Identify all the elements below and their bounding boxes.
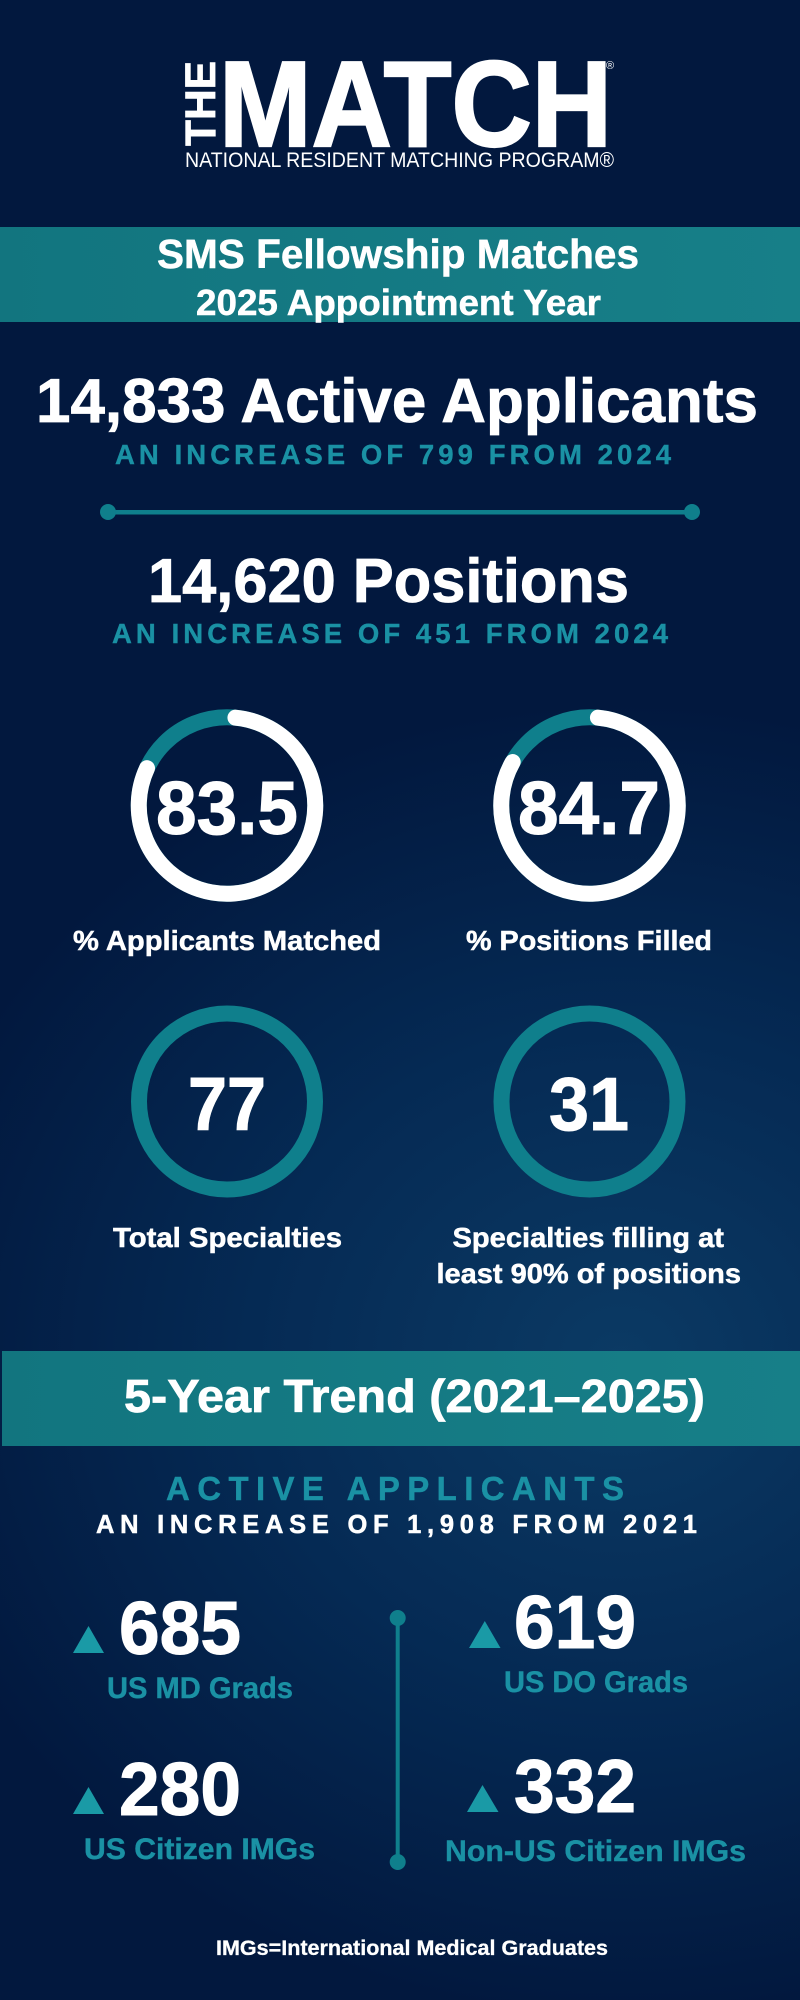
- trend increase note: AN INCREASE OF 1,908 FROM 2021: [96, 1511, 697, 1539]
- title line 1: SMS Fellowship Matches: [157, 231, 639, 277]
- ring: total specialties: [113, 1014, 342, 1253]
- gauge: percent positions filled: [466, 717, 712, 956]
- logo: The Match, National Resident Matching Program: [177, 36, 614, 172]
- label US MD Grads: US MD Grads: [107, 1672, 293, 1705]
- icon: up triangle: [73, 1626, 104, 1653]
- trend subheading: ACTIVE APPLICANTS: [166, 1470, 624, 1507]
- value 332: 332: [514, 1744, 636, 1828]
- title banner: [0, 227, 800, 323]
- stat: active applicants: [36, 366, 758, 470]
- value 83.5: 83.5: [156, 766, 298, 850]
- logo subtitle: NATIONAL RESIDENT MATCHING PROGRAM®: [185, 149, 614, 172]
- positions increase note: AN INCREASE OF 451 FROM 2024: [112, 618, 669, 649]
- icon: up triangle: [467, 1785, 498, 1812]
- stat: active applicants: 14,833 Active Applicants: [36, 366, 758, 436]
- stat: US MD Grads: [73, 1586, 293, 1705]
- label Non-US Citizen IMGs: Non-US Citizen IMGs: [445, 1835, 746, 1868]
- trend subheading: [96, 1470, 697, 1539]
- label US Citizen IMGs: US Citizen IMGs: [84, 1833, 315, 1866]
- logo word: THE: THE: [177, 61, 225, 146]
- trend heading: 5-Year Trend (2021–2025): [124, 1370, 705, 1422]
- title line 2: 2025 Appointment Year: [196, 282, 601, 323]
- logo word: MATCH: MATCH: [219, 36, 612, 172]
- stat: positions: 14,620 Positions: [148, 546, 629, 616]
- icon: up triangle: [73, 1787, 104, 1814]
- value 685: 685: [119, 1586, 241, 1670]
- label US DO Grads: US DO Grads: [504, 1666, 688, 1699]
- label positions filled: % Positions Filled: [466, 925, 712, 956]
- stat: US DO Grads: [469, 1580, 688, 1699]
- value 31: 31: [549, 1062, 629, 1146]
- value 77: 77: [188, 1062, 266, 1146]
- value 619: 619: [514, 1580, 636, 1664]
- label specialties filling line 1: Specialties filling at: [452, 1222, 724, 1253]
- stat: positions: [112, 546, 669, 649]
- applicants increase note: AN INCREASE OF 799 FROM 2024: [115, 439, 672, 470]
- value 84.7: 84.7: [518, 766, 660, 850]
- vertical divider with end dots: [390, 1610, 406, 1870]
- value 280: 280: [119, 1747, 241, 1831]
- footnote: IMGs=International Medical Graduates: [216, 1937, 608, 1960]
- gauge: percent applicants matched: [73, 717, 381, 956]
- icon: up triangle: [469, 1621, 500, 1648]
- logo registered mark: ®: [606, 60, 614, 72]
- stat: Non-US Citizen IMGs: [445, 1744, 746, 1868]
- horizontal divider with end dots: [100, 504, 700, 520]
- label applicants matched: % Applicants Matched: [73, 925, 381, 956]
- stat: US Citizen IMGs: [73, 1747, 315, 1866]
- trend banner: [2, 1351, 800, 1446]
- ring: specialties filling at least 90 percent: [436, 1014, 741, 1289]
- label total specialties: Total Specialties: [113, 1222, 342, 1253]
- label specialties filling line 2: least 90% of positions: [436, 1258, 741, 1289]
